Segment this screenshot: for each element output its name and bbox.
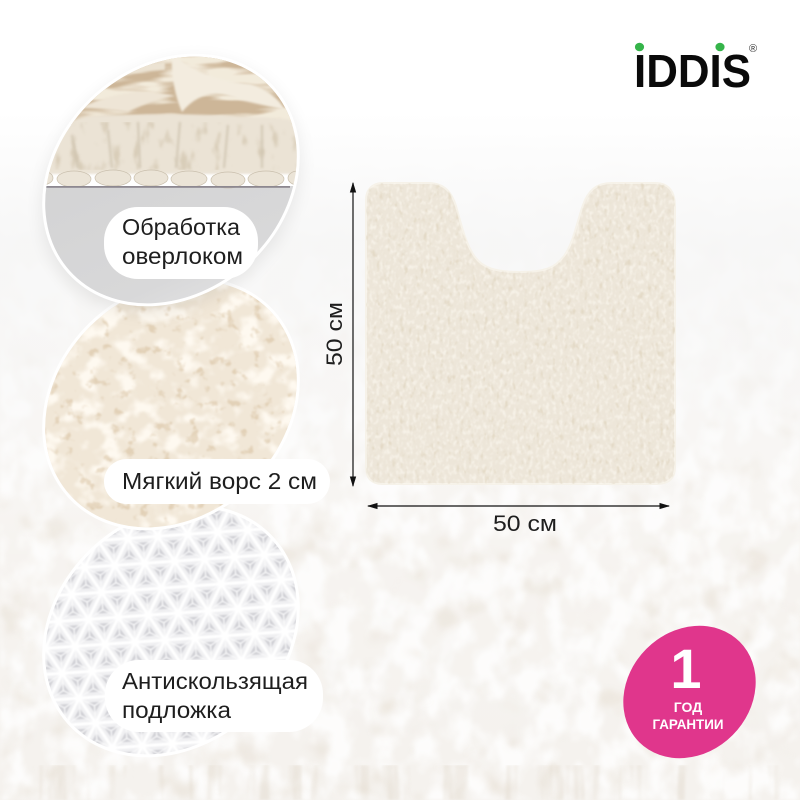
label: overlock: оверлоком — [122, 243, 243, 269]
gray surface under the rug — [45, 186, 294, 304]
label: anti-slip — [105, 660, 323, 732]
stitched seam — [31, 170, 308, 188]
panel: anti-slip backing — [42, 508, 300, 757]
dimension: height label: 50 см — [322, 302, 347, 366]
label: anti-slip: подложка — [122, 697, 232, 723]
dimension: width label: 50 см — [493, 511, 557, 536]
logo: IDDIS: IDDIS — [634, 45, 751, 97]
label: anti-slip: Антискользящая — [122, 668, 308, 694]
label: overlock: Обработка — [122, 214, 241, 240]
label: overlock — [104, 207, 258, 279]
dimension: width arrow — [368, 505, 669, 507]
badge: one year warranty: 1 — [670, 637, 702, 700]
product: bath mat — [360, 180, 680, 490]
panel: soft pile — [42, 284, 300, 530]
logo: IDDIS: ® — [749, 43, 757, 55]
badge: one year warranty: ГАРАНТИИ — [652, 716, 724, 732]
dimension: height arrow — [352, 183, 354, 486]
panel: overlock edging — [41, 56, 301, 314]
badge: one year warranty — [596, 599, 783, 785]
label: soft pile — [104, 459, 330, 504]
badge: one year warranty: ГОД — [674, 699, 702, 715]
braided edging — [40, 114, 310, 174]
label: soft pile: Мягкий ворс 2 см — [122, 468, 317, 494]
fur strands above the edging — [71, 56, 292, 125]
